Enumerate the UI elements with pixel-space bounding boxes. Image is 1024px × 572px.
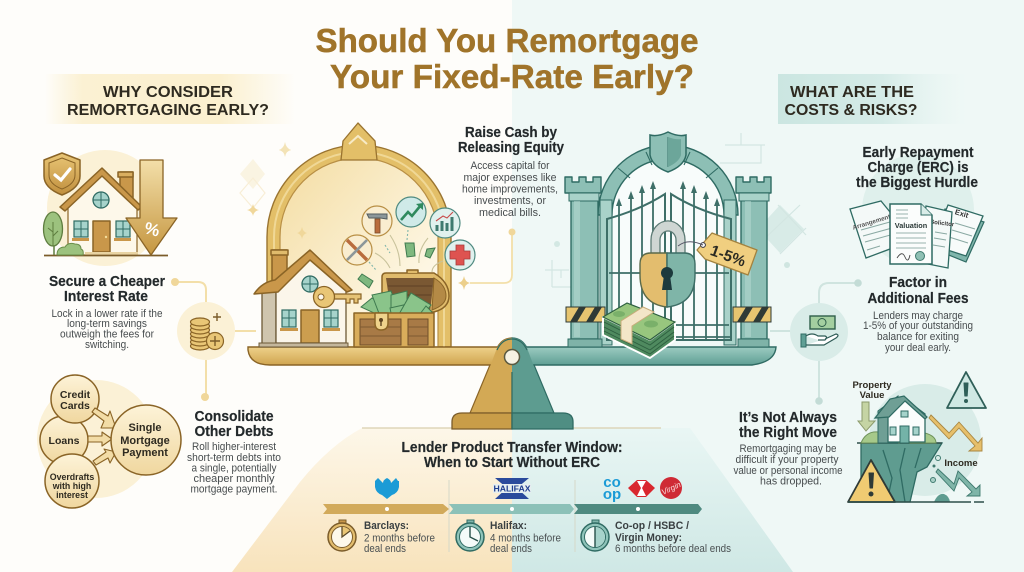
text block: raise cash: investments, or <box>474 195 546 207</box>
text block: secure a cheaper interest rate: switching. <box>85 339 129 351</box>
connector and icon: coins <box>171 278 256 401</box>
logo: Co-op <box>603 474 621 503</box>
text block: additional fees: 1-5% of your outstanding <box>863 320 973 332</box>
stone arch <box>598 145 738 345</box>
logo: Co-op: co <box>603 474 621 491</box>
label: Co-op HSBC Virgin: Co-op / HSBC / <box>615 520 689 532</box>
panel: lender product transfer window <box>232 428 793 572</box>
diagram: debt consolidation <box>37 375 181 508</box>
icon: growth arrow circle <box>396 197 426 227</box>
debt: single mortgage payment: Mortgage <box>120 435 170 447</box>
heading band: why consider: WHY CONSIDER <box>103 84 233 101</box>
scale: right plate <box>512 347 776 365</box>
gate bars <box>607 186 731 340</box>
decorative sparkles left <box>240 144 291 216</box>
heading: window: When to Start Without ERC <box>424 455 600 471</box>
label: Co-op HSBC Virgin: 6 months before deal ends <box>615 543 731 555</box>
arrows into mortgage <box>88 408 116 465</box>
logo: Co-op: op <box>603 486 621 503</box>
text block: additional fees <box>863 275 973 354</box>
heading: window <box>402 440 622 471</box>
text block: secure a cheaper interest rate: outweigh the fees for <box>60 328 154 340</box>
text block: additional fees: Lenders may charge <box>873 310 963 322</box>
timeline chevrons <box>323 504 702 514</box>
text block: additional fees: Factor in <box>889 275 947 291</box>
label: property value: Value <box>860 390 884 401</box>
icon: hammer circle <box>362 206 392 236</box>
illustration: treasure chest with cash <box>354 270 449 347</box>
logo: Halifax: HALIFAX <box>494 484 531 494</box>
title: Should You Remortgage <box>316 22 698 59</box>
heading band: costs and risks: COSTS & RISKS? <box>784 102 918 119</box>
price tag 1-5% <box>678 233 757 275</box>
text block: not always the right move: has dropped. <box>760 476 822 488</box>
icon: bar chart circle <box>430 208 460 238</box>
text block: ERC: Charge (ERC) is <box>868 160 968 176</box>
stopwatch: Co-op HSBC Virgin <box>581 520 609 551</box>
text block: raise cash: major expenses like <box>464 172 556 184</box>
text block: ERC: Early Repayment <box>862 145 974 161</box>
flying bills and motion lines <box>358 230 443 288</box>
text block: consolidate other debts: a single, potentially <box>192 462 277 474</box>
icon: tools circle <box>342 235 372 265</box>
icon: key <box>314 286 361 308</box>
arrow: falling income <box>936 469 980 496</box>
decorative bricks and diamonds right <box>545 133 806 287</box>
heading band: costs and risks: WHAT ARE THE <box>790 84 914 101</box>
text block: secure a cheaper interest rate: Secure a Cheaper <box>49 274 165 290</box>
text block: consolidate other debts: Consolidate <box>194 409 274 425</box>
heading band: why consider <box>45 74 295 124</box>
logo: Virgin: Virgin <box>660 480 683 497</box>
debt: credit cards <box>51 375 99 423</box>
text block: raise cash <box>458 125 564 219</box>
text block: additional fees: Additional Fees <box>868 291 968 307</box>
text block: raise cash: Raise Cash by <box>465 125 557 141</box>
text block: not always the right move: It’s Not Always <box>739 410 837 426</box>
icon: fee documents <box>850 154 984 268</box>
text block: additional fees: balance for exiting <box>877 331 959 343</box>
document: exit: Exit <box>954 207 970 220</box>
debt: credit cards: Cards <box>60 400 90 412</box>
debt: credit cards: Credit <box>60 389 91 401</box>
document: policy: Solicitor <box>930 220 955 229</box>
label: Halifax: deal ends <box>490 543 532 555</box>
text block: secure a cheaper interest rate: long-term savings <box>67 318 148 330</box>
label: Halifax <box>490 520 561 555</box>
text block: secure a cheaper interest rate: Interest Rate <box>64 289 148 305</box>
debt: overdrafts: Overdrafts <box>50 472 94 482</box>
hazard stripes <box>566 307 771 322</box>
title: Your Fixed-Rate Early? <box>330 58 694 95</box>
text block: ERC: the Biggest Hurdle <box>856 175 978 191</box>
text block: secure a cheaper interest rate: Lock in a lower rate if the <box>52 308 162 320</box>
label: Barclays: deal ends <box>364 543 406 555</box>
label: Barclays: Barclays: <box>364 520 409 532</box>
illustration: locked gate <box>565 132 771 358</box>
logo: HSBC <box>628 480 655 497</box>
left pillar <box>565 177 602 347</box>
text block: raise cash: medical bills. <box>479 207 541 219</box>
background: right teal half <box>512 0 1024 572</box>
text block: not always the right move <box>734 410 842 488</box>
debt: single mortgage payment: Payment <box>122 447 168 459</box>
icon: down arrow with percent: % <box>142 218 162 241</box>
text block: consolidate other debts: Roll higher-interest <box>192 441 276 453</box>
price tag 1-5%: 1-5% <box>708 242 748 271</box>
text block: raise cash: home improvements, <box>462 184 558 196</box>
text block: additional fees: your deal early. <box>885 342 951 354</box>
logo: Halifax <box>493 478 531 499</box>
text block: ERC <box>856 145 978 191</box>
debt: single mortgage payment: Single <box>128 422 162 434</box>
text block: consolidate other debts: mortgage payment. <box>190 484 278 496</box>
label: Barclays: 2 months before <box>364 532 435 544</box>
icon: cheaper rate house <box>44 150 177 266</box>
debt: overdrafts: with high <box>52 481 91 491</box>
icon: shield check <box>44 153 80 195</box>
label: Co-op HSBC Virgin <box>615 520 731 555</box>
cliff house <box>875 396 927 443</box>
debt: single mortgage payment <box>111 405 181 475</box>
label: property value: Property <box>852 380 892 391</box>
arrow: falling value <box>929 415 982 451</box>
background: left warm half <box>0 0 512 572</box>
right pillar <box>736 177 771 347</box>
document: arrangement: Arrangement <box>852 213 892 232</box>
text block: consolidate other debts: Other Debts <box>194 424 274 440</box>
icon: medical cross circle <box>445 240 475 270</box>
text block: not always the right move: value or personal income <box>734 465 842 477</box>
warning triangle: teal <box>947 372 986 408</box>
debt: overdrafts <box>45 454 99 508</box>
debt: loans <box>40 416 88 464</box>
logo: Barclays eagle <box>375 478 399 499</box>
connector and icon: fees hand with money <box>770 279 862 405</box>
text block: not always the right move: difficult if your property <box>736 454 839 466</box>
text block: not always the right move: Remortgaging may be <box>740 443 836 455</box>
heading: window: Lender Product Transfer Window: <box>402 440 622 456</box>
label: Halifax: 4 months before <box>490 532 561 544</box>
warning triangle: gold <box>848 460 895 502</box>
text block: secure a cheaper interest rate <box>49 274 165 351</box>
debt: overdrafts: interest <box>56 490 88 500</box>
scale: pivot <box>488 338 536 372</box>
icon: falling property value cliff <box>848 372 986 502</box>
title <box>316 22 698 95</box>
text block: consolidate other debts: cheaper monthly <box>194 473 275 485</box>
shield crest <box>650 132 686 172</box>
illustration: house with key <box>254 250 361 347</box>
label: Co-op HSBC Virgin: Virgin Money: <box>615 532 682 544</box>
stopwatch: Barclays <box>328 520 356 551</box>
label: Barclays <box>364 520 435 555</box>
heading band: costs and risks <box>778 74 968 124</box>
text block: consolidate other debts: short-term debts into <box>187 452 281 464</box>
heading band: why consider: REMORTGAGING EARLY? <box>67 102 269 119</box>
label: Halifax: Halifax: <box>490 520 527 532</box>
label: income: Income <box>944 458 978 469</box>
text block: raise cash: Access capital for <box>470 160 550 172</box>
scale: left plate <box>248 347 512 365</box>
cash in chest <box>361 291 432 318</box>
label: property value <box>852 380 892 431</box>
stopwatch: Halifax <box>456 520 484 551</box>
scale: fulcrum <box>452 338 573 429</box>
rocks and ground <box>848 456 984 502</box>
debt: loans: Loans <box>49 435 80 447</box>
illustration: golden arch <box>267 123 451 347</box>
text block: not always the right move: the Right Move <box>739 425 837 441</box>
padlock <box>640 221 695 307</box>
connector: raise cash <box>458 228 516 290</box>
document: valuation: Valuation <box>895 221 927 230</box>
text block: consolidate other debts <box>187 409 281 496</box>
cash stack <box>603 303 675 358</box>
text block: raise cash: Releasing Equity <box>458 140 564 156</box>
